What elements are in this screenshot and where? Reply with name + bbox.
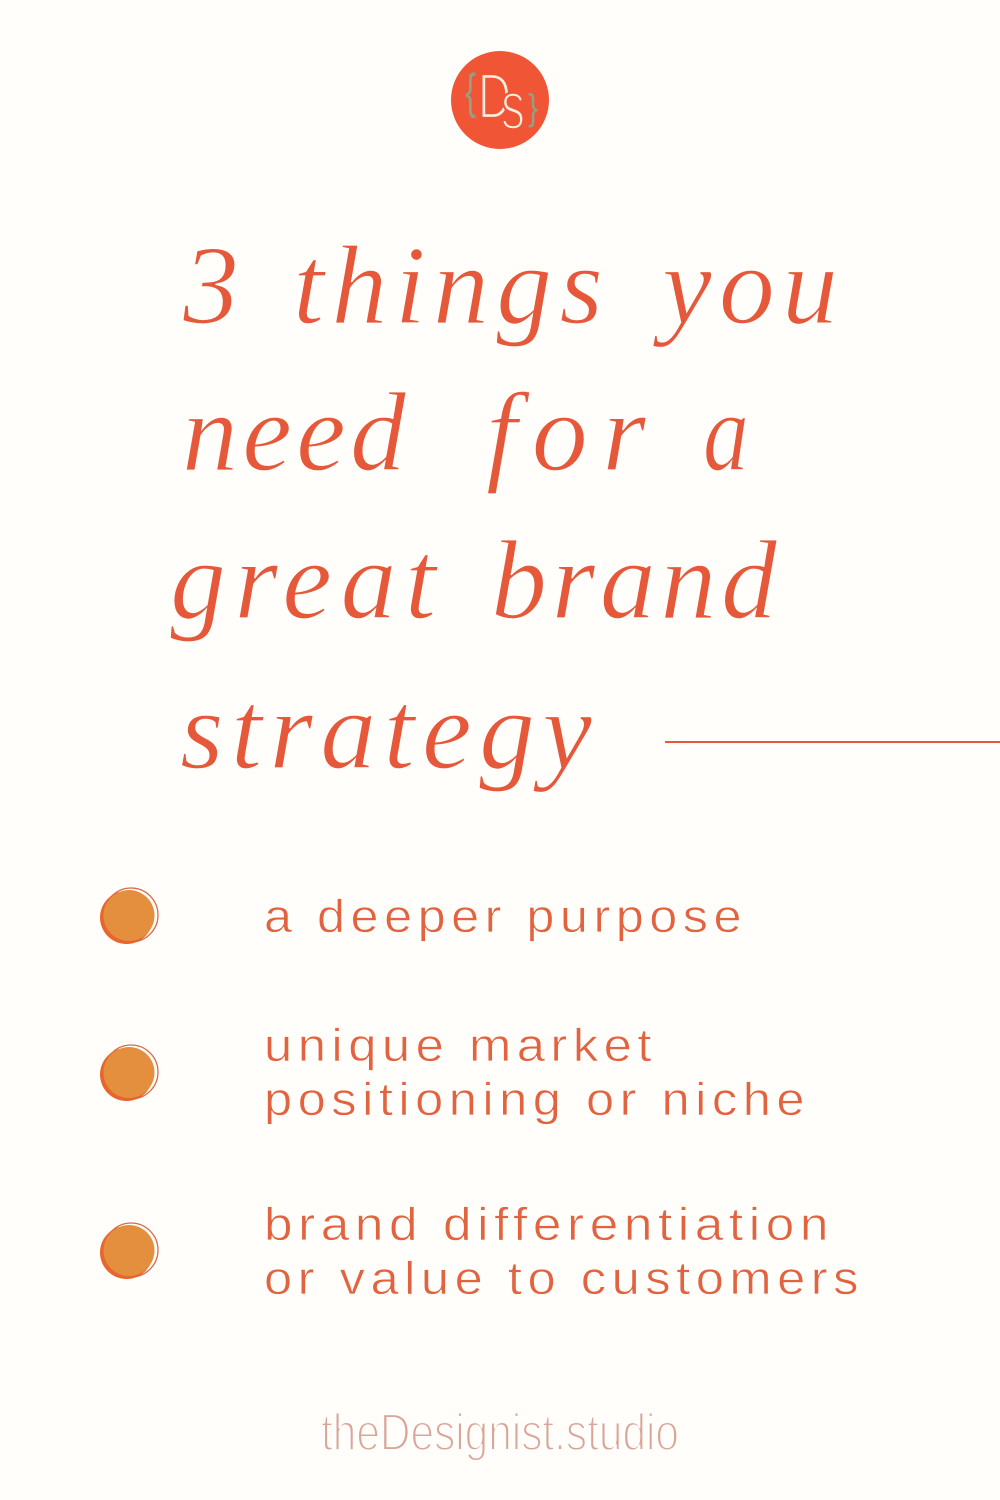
bullet 2 text (264, 1019, 810, 1125)
bullet 3 icon (100, 1223, 158, 1279)
title: brand (491, 519, 778, 643)
bullet 3 text: or value to customers (264, 1252, 864, 1304)
title (170, 224, 838, 793)
title: 3 (182, 224, 239, 348)
logo: } (528, 87, 538, 128)
footer website: theDesignist.studio (321, 1404, 679, 1462)
bullet 1 icon (100, 888, 158, 944)
bullet 1 text: a deeper purpose (264, 890, 747, 942)
logo (451, 51, 549, 149)
logo: s (501, 68, 525, 144)
title: for (486, 371, 646, 495)
bullet 3 text (264, 1198, 864, 1304)
logo: D (478, 60, 511, 132)
bullet 2 text: unique market (264, 1019, 657, 1071)
title: a (703, 371, 749, 495)
bullet 2 icon (100, 1045, 158, 1101)
title: great (170, 519, 439, 643)
title: strategy (180, 669, 592, 793)
logo: { (465, 65, 476, 119)
title: need (182, 371, 407, 495)
title: you (652, 224, 838, 348)
bullet 2 text: positioning or niche (264, 1073, 810, 1125)
bullet 3 text: brand differentiation (264, 1198, 834, 1250)
title: things (293, 224, 603, 348)
title rule line (665, 741, 1000, 743)
